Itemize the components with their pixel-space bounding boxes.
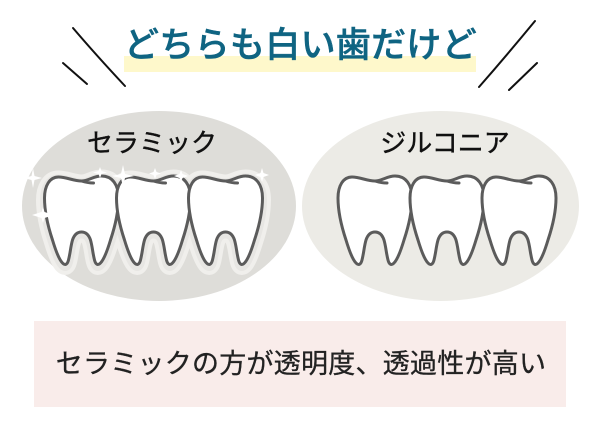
conclusion box (34, 321, 566, 407)
panel: ceramic ellipse (22, 111, 296, 301)
ceramic teeth (44, 176, 262, 264)
panel: zirconia ellipse (302, 111, 579, 301)
zirconia teeth (338, 176, 556, 264)
sparkles (24, 165, 269, 223)
label: ceramic: セラミック (87, 128, 217, 158)
conclusion text: セラミックの方が透明度、透過性が高い (56, 349, 546, 379)
label: zirconia: ジルコニア (380, 128, 510, 158)
title: どちらも白い歯だけど (124, 26, 477, 65)
emphasis lines (62, 20, 538, 91)
ceramic teeth glow (44, 178, 262, 266)
title highlight band (124, 56, 476, 72)
